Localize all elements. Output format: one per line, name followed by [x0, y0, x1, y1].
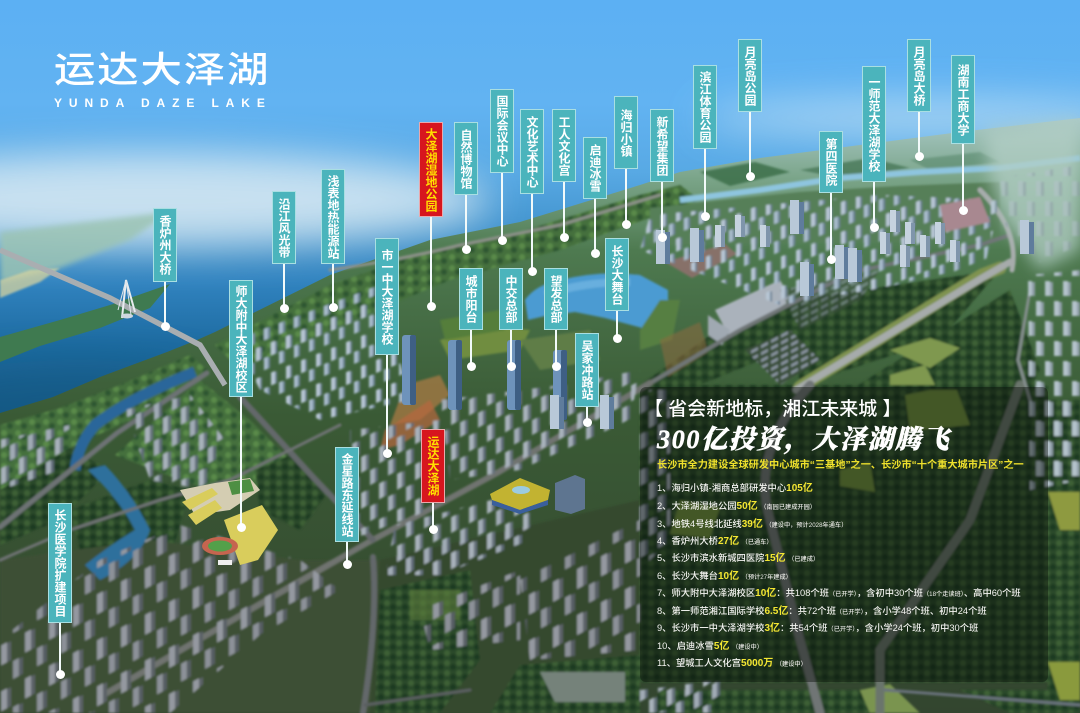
marker: 香炉州大桥: 香炉州大桥 [158, 215, 172, 275]
list item 1: 1、海归小镇-湘商总部研发中心105亿 [657, 483, 813, 494]
marker: 城市阳台: 城市阳台 [464, 275, 478, 323]
central lake [525, 273, 668, 330]
marker: 新希望集团: 新希望集团 [655, 116, 669, 176]
marker: 中交总部: 中交总部 [504, 275, 518, 323]
marker: 新希望集团 [650, 109, 674, 242]
marker: 运达大泽湖 [421, 429, 445, 534]
marker: 启迪冰雪: 启迪冰雪 [588, 144, 602, 192]
residential towers [235, 285, 410, 420]
marker: 国际会议中心: 国际会议中心 [495, 95, 509, 167]
marker: 国际会议中心 [490, 89, 514, 245]
title: 运达大泽湖 [54, 49, 270, 90]
marker: 吴家冲路站: 吴家冲路站 [580, 340, 594, 400]
list item 3: 3、地铁4号线北延线39亿 （建设中，预计2028年通车） [657, 519, 847, 530]
marker: 自然博物馆: 自然博物馆 [459, 128, 473, 188]
marker: 师大附中大泽湖校区: 师大附中大泽湖校区 [234, 284, 248, 392]
marker: 沿江风光带: 沿江风光带 [277, 198, 291, 258]
marker: 第四医院: 第四医院 [824, 138, 838, 186]
land patches [0, 355, 210, 490]
marker: 运达大泽湖: 运达大泽湖 [426, 436, 440, 496]
list item 4: 4、香炉州大桥27亿 （已通车） [657, 536, 773, 547]
list item 10: 10、启迪冰雪5亿 （建设中） [657, 641, 763, 652]
marker: 师大附中大泽湖校区 [229, 280, 253, 532]
school campus with stadiums [180, 478, 278, 565]
title [54, 49, 272, 110]
marker: 滨江体育公园: 滨江体育公园 [698, 71, 712, 143]
bridge [0, 250, 225, 385]
list item 6: 6、长沙大舞台10亿 （预计27年建成） [657, 571, 792, 582]
marker: 工人文化宫 [552, 109, 576, 242]
sky and river water [0, 0, 1080, 430]
marker: 一师范大泽湖学校: 一师范大泽湖学校 [867, 76, 881, 172]
far right hazy district [985, 118, 1080, 270]
panel heading: 【 省会新地标，湘江未来城 】 [644, 399, 902, 420]
island [0, 284, 170, 362]
list item 11: 11、望城工人文化宫5000万 （建设中） [657, 658, 807, 669]
list item 8: 8、第一师范湘江国际学校6.5亿：共72个班（已开学），含小学48个班、初中24个班 [657, 606, 987, 617]
marker: 长沙大舞台 [605, 238, 629, 343]
roads [0, 190, 1080, 713]
list item 5: 5、长沙市滨水新城四医院15亿 （已建成） [657, 553, 819, 564]
moon island canal [680, 158, 1080, 200]
colourful park [390, 375, 450, 425]
marker: 沿江风光带 [272, 191, 296, 313]
marker: 月亮岛公园 [738, 39, 762, 181]
marker: 望发总部 [544, 268, 568, 371]
marker: 长沙医学院扩建项目 [48, 503, 72, 679]
marker: 吴家冲路站 [575, 333, 599, 427]
marker: 浅表地热能源站: 浅表地热能源站 [326, 174, 340, 258]
marker: 文化艺术中心 [520, 109, 544, 276]
marker: 香炉州大桥 [153, 208, 177, 331]
grey parcels [715, 280, 792, 338]
marker: 月亮岛大桥 [907, 39, 931, 161]
marker: 长沙医学院扩建项目: 长沙医学院扩建项目 [53, 509, 67, 617]
panel: investment summary [640, 387, 1048, 682]
landmark towers [402, 335, 416, 405]
marker: 自然博物馆 [454, 122, 478, 254]
list item 7: 7、师大附中大泽湖校区10亿：共108个班（已开学），含初中30个班（18个走读班）、高中60个班 [657, 588, 1021, 599]
marker: 金星路东延线站: 金星路东延线站 [340, 452, 354, 536]
marker: 市一中大泽湖学校: 市一中大泽湖学校 [380, 248, 394, 344]
marker: 市一中大泽湖学校 [375, 238, 399, 458]
marker: 湖南工商大学: 湖南工商大学 [956, 64, 970, 136]
list item 2: 2、大泽湖湿地公园50亿 （南园已建成开园） [657, 501, 816, 512]
marker: 望发总部: 望发总部 [549, 275, 563, 323]
upper promenade [215, 185, 700, 370]
marker: 大泽湖湿地公园 [419, 122, 443, 311]
marker: 文化艺术中心: 文化艺术中心 [525, 116, 539, 188]
gymnasium [490, 478, 550, 510]
marker: 启迪冰雪 [583, 137, 607, 258]
marker: 第四医院 [819, 131, 843, 264]
subtitle: YUNDA DAZE LAKE [54, 96, 272, 110]
marker: 金星路东延线站 [335, 447, 359, 569]
marker: 工人文化宫: 工人文化宫 [557, 116, 571, 176]
marker: 大泽湖湿地公园: 大泽湖湿地公园 [424, 128, 438, 212]
marker: 长沙大舞台: 长沙大舞台 [610, 244, 624, 304]
marker: 月亮岛大桥: 月亮岛大桥 [912, 46, 926, 106]
marker: 海归小镇 [614, 96, 638, 229]
yellow subheading: 长沙市全力建设全球研发中心城市“三基地”之一、长沙市“十个重大城市片区”之一 [657, 460, 1024, 471]
marker: 月亮岛公园: 月亮岛公园 [743, 46, 757, 106]
marker: 海归小镇: 海归小镇 [619, 108, 633, 156]
headline: 300亿投资: 300亿投资，大泽湖腾飞 [657, 425, 950, 454]
marker: 湖南工商大学 [951, 55, 975, 215]
list item 9: 9、长沙市一中大泽湖学校3亿：共54个班（已开学），含小学24个班，初中30个班 [657, 623, 978, 634]
marker: 浅表地热能源站 [321, 169, 345, 312]
inner canals and lakes [75, 372, 195, 470]
marker: 城市阳台 [459, 268, 483, 371]
marker: 滨江体育公园 [693, 65, 717, 221]
far shore left [0, 212, 170, 282]
marker: 一师范大泽湖学校 [862, 66, 886, 232]
marker: 中交总部 [499, 268, 523, 371]
